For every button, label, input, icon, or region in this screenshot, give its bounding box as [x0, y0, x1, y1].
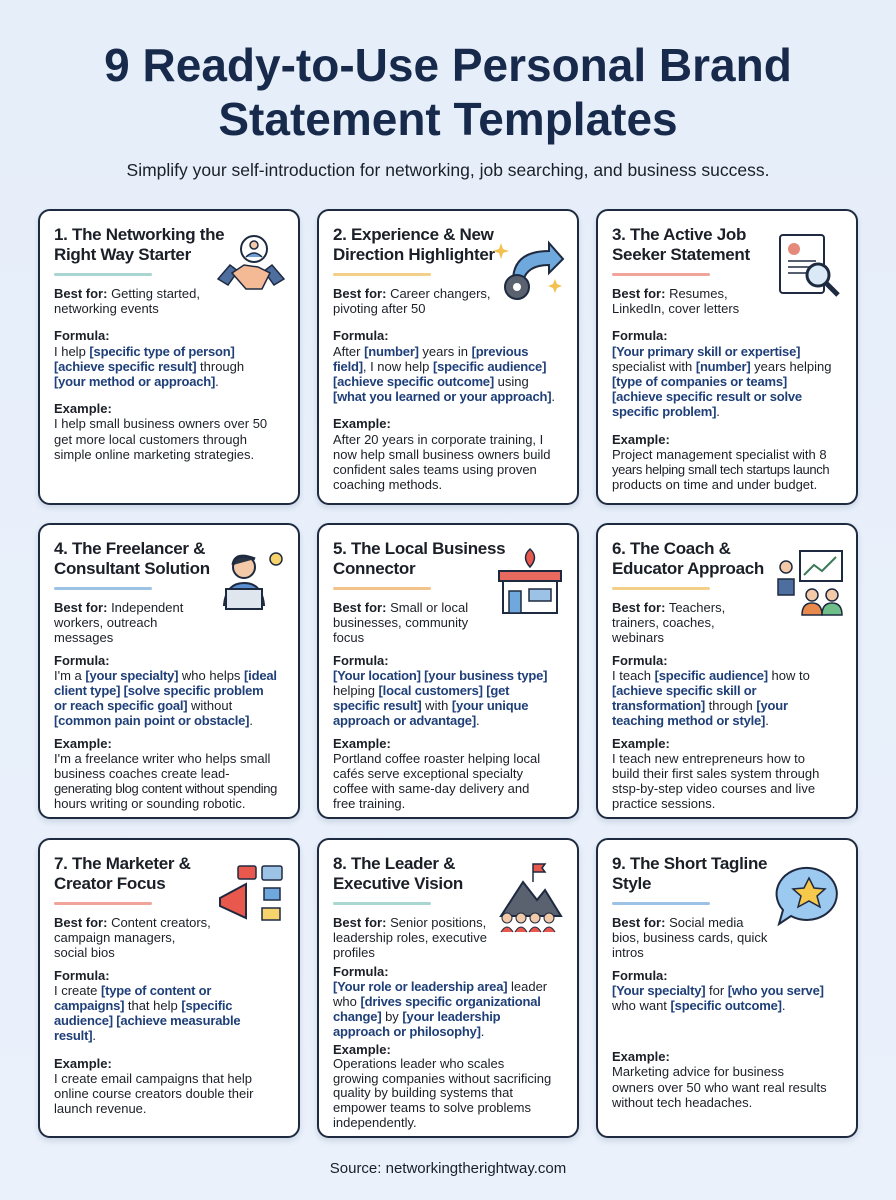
panel: card 4: I'm a [your specialty] who helps [ideal: [54, 668, 277, 683]
panel: card 8: independently.: [333, 1115, 417, 1130]
panel: card 4: Best for: Independent: [54, 600, 183, 615]
panel: card 7: audience] [achieve measurable: [54, 1013, 240, 1028]
panel: card 8: change] by [your leadership: [333, 1009, 500, 1024]
panel: card 2: pivoting after 50: [333, 301, 426, 316]
panel: card 6: stsp-by-step video courses and live: [612, 781, 815, 796]
panel: card 7: campaigns] that help [specific: [54, 998, 232, 1013]
panel: card 7: Example:: [54, 1056, 112, 1071]
panel: card 7: Formula:: [54, 968, 110, 983]
panel: card 7: online course creators double their: [54, 1086, 253, 1101]
panel: card 4: workers, outreach: [54, 615, 157, 630]
icon: handshake: [216, 235, 286, 290]
panel: card 1: [38, 209, 300, 505]
panel: card 4: messages: [54, 630, 113, 645]
panel: card 5: specific result] with [your unique: [333, 698, 528, 713]
panel: card 4: Formula:: [54, 653, 110, 668]
panel: card 1: Example:: [54, 401, 112, 416]
panel: card 3: products on time and under budget.: [612, 477, 817, 492]
panel: card 6: transformation] through [your: [612, 698, 788, 713]
panel: card 2: confident sales teams using proven: [333, 462, 537, 477]
panel: card 4: Example:: [54, 736, 112, 751]
panel: card 5: approach or advantage].: [333, 713, 480, 728]
panel: card 7: launch revenue.: [54, 1101, 147, 1116]
panel: card 9: Marketing advice for business: [612, 1064, 784, 1079]
icon: mountain team: [499, 863, 563, 932]
panel: card 8: [Your role or leadership area] leader: [333, 979, 547, 994]
panel: card 2: After 20 years in corporate training, I: [333, 432, 543, 447]
panel: card 1: networking events: [54, 301, 159, 316]
panel: card 5: helping [local customers] [get: [333, 683, 509, 698]
panel: card 8: 8. The Leader & Executive Vision: [333, 854, 463, 893]
panel: card 4: client type] [solve specific problem: [54, 683, 264, 698]
panel: card 3: Project management specialist with 8: [612, 447, 827, 462]
icon: teacher board: [777, 550, 843, 616]
panel: card 2: field], I now help [specific audience]: [333, 359, 546, 374]
panel: card 5: free training.: [333, 796, 405, 811]
panel: card 9: who want [specific outcome].: [612, 998, 785, 1013]
panel: card 6: [achieve specific skill or: [612, 683, 756, 698]
panel: card 3: [achieve specific result or solve: [612, 389, 802, 404]
panel: card 8: approach or philosophy].: [333, 1024, 484, 1039]
panel: card 3: specific problem].: [612, 404, 720, 419]
panel: card 1: Best for: Getting started,: [54, 286, 200, 301]
icon: megaphone: [219, 865, 283, 921]
panel: card 1: [achieve specific result] through: [54, 359, 244, 374]
panel: card 8: leadership roles, executive: [333, 930, 487, 945]
panel: card 8: Operations leader who scales: [333, 1056, 504, 1071]
panel: card 1: get more local customers through: [54, 432, 247, 447]
source: Source: networkingtherightway.com: [330, 1160, 566, 1177]
panel: card 3: specialist with [number] years helping: [612, 359, 832, 374]
panel: card 6: Formula:: [612, 653, 668, 668]
panel: card 7: I create [type of content or: [54, 983, 211, 998]
panel: card 6: 6. The Coach & Educator Approach: [612, 539, 764, 578]
panel: card 6: [596, 523, 858, 819]
panel: card 3: 3. The Active Job Seeker Statement: [612, 225, 750, 264]
panel: card 3: [596, 209, 858, 505]
panel: card 7: result].: [54, 1028, 96, 1043]
icon: storefront: [498, 548, 562, 614]
panel: card 2: 2. Experience & New Direction Highlighter: [333, 225, 495, 264]
panel: card 9: Example:: [612, 1049, 670, 1064]
panel: card 4: or reach specific goal] without: [54, 698, 232, 713]
icon: person laptop: [222, 552, 283, 610]
panel: card 6: trainers, coaches,: [612, 615, 715, 630]
panel: card 8: empower teams to solve problems: [333, 1100, 531, 1115]
panel: card 6: I teach [specific audience] how to: [612, 668, 810, 683]
panel: card 5: cafés serve exceptional specialty: [333, 766, 523, 781]
panel: card 2: Formula:: [333, 328, 389, 343]
panel: card 2: Example:: [333, 416, 391, 431]
panel: card 2: coaching methods.: [333, 477, 442, 492]
panel: card 5: coffee with same-day delivery and: [333, 781, 529, 796]
panel: card 6: build their first sales system through: [612, 766, 819, 781]
panel: card 4: hours writing or sounding robotic.: [54, 796, 246, 811]
panel: card 9: [Your specialty] for [who you serve]: [612, 983, 824, 998]
panel: card 9: Best for: Social media: [612, 915, 744, 930]
panel: card 3: [type of companies or teams]: [612, 374, 787, 389]
panel: card 8: Formula:: [333, 964, 389, 979]
panel: card 2: [317, 209, 579, 505]
panel: card 6: teaching method or style].: [612, 713, 769, 728]
panel: card 5: [317, 523, 579, 819]
panel: card 7: campaign managers,: [54, 930, 175, 945]
panel: card 1: 1. The Networking the Right Way Starter: [54, 225, 224, 264]
panel: card 5: Best for: Small or local: [333, 600, 468, 615]
panel: card 6: webinars: [612, 630, 664, 645]
panel: card 5: [Your location] [your business type]: [333, 668, 547, 683]
panel: card 3: Formula:: [612, 328, 668, 343]
panel: card 9: intros: [612, 945, 644, 960]
panel: card 9: Formula:: [612, 968, 668, 983]
panel: card 9: [596, 838, 858, 1138]
icon: gear arrow: [493, 240, 564, 300]
panel: card 3: [Your primary skill or expertise]: [612, 344, 800, 359]
title: [104, 39, 792, 145]
panel: card 9: without tech headaches.: [612, 1095, 752, 1110]
panel: card 4: I'm a freelance writer who helps small: [54, 751, 270, 766]
panel: card 3: years helping small tech startups launch: [612, 462, 829, 477]
panel: card 3: Example:: [612, 432, 670, 447]
panel: card 7: social bios: [54, 945, 115, 960]
panel: card 2: [what you learned or your approach].: [333, 389, 555, 404]
panel: card 5: businesses, community: [333, 615, 468, 630]
panel: card 8: Best for: Senior positions,: [333, 915, 486, 930]
panel: card 2: now help small business owners build: [333, 447, 551, 462]
panel: card 4: [common pain point or obstacle].: [54, 713, 253, 728]
panel: card 6: I teach new entrepreneurs how to: [612, 751, 805, 766]
icon: resume magnifier: [779, 234, 840, 297]
panel: card 1: [your method or approach].: [54, 374, 219, 389]
panel: card 7: 7. The Marketer & Creator Focus: [54, 854, 191, 893]
panel: card 3: Best for: Resumes,: [612, 286, 728, 301]
panel: card 8: growing companies without sacrificing: [333, 1071, 551, 1086]
panel: card 5: 5. The Local Business Connector: [333, 539, 505, 578]
panel: card 5: focus: [333, 630, 364, 645]
panel: card 6: Best for: Teachers,: [612, 600, 725, 615]
panel: card 7: Best for: Content creators,: [54, 915, 211, 930]
panel: card 4: [38, 523, 300, 819]
panel: card 4: generating blog content without spending: [54, 781, 277, 796]
panel: card 3: LinkedIn, cover letters: [612, 301, 739, 316]
panel: card 2: [achieve specific outcome] using: [333, 374, 529, 389]
panel: card 7: I create email campaigns that help: [54, 1071, 252, 1086]
panel: card 8: profiles: [333, 945, 375, 960]
panel: card 4: 4. The Freelancer & Consultant Solution: [54, 539, 210, 578]
panel: card 1: Formula:: [54, 328, 110, 343]
panel: card 4: business coaches create lead-: [54, 766, 230, 781]
panel: card 7: [38, 838, 300, 1138]
panel: card 5: Example:: [333, 736, 391, 751]
panel: card 9: owners over 50 who want real results: [612, 1080, 827, 1095]
panel: card 9: bios, business cards, quick: [612, 930, 767, 945]
panel: card 1: I help small business owners over 50: [54, 416, 267, 431]
title: 9 Ready-to-Use Personal Brand: [104, 39, 792, 91]
panel: card 8: quality by building systems that: [333, 1085, 513, 1100]
panel: card 1: simple online marketing strategies.: [54, 447, 254, 462]
panel: card 6: Example:: [612, 736, 670, 751]
title: Statement Templates: [218, 93, 678, 145]
panel: card 2: After [number] years in [previous: [333, 344, 528, 359]
panel: card 6: practice sessions.: [612, 796, 715, 811]
panel: card 5: Portland coffee roaster helping local: [333, 751, 540, 766]
panel: card 8: [317, 838, 579, 1138]
subtitle: Simplify your self-introduction for networking, job searching, and business success.: [127, 160, 769, 180]
panel: card 9: 9. The Short Tagline Style: [612, 854, 767, 893]
panel: card 8: Example:: [333, 1042, 391, 1057]
panel: card 1: I help [specific type of person]: [54, 344, 235, 359]
panel: card 5: Formula:: [333, 653, 389, 668]
icon: star bubble: [776, 866, 838, 926]
panel: card 2: Best for: Career changers,: [333, 286, 491, 301]
panel: card 8: who [drives specific organizational: [333, 994, 541, 1009]
